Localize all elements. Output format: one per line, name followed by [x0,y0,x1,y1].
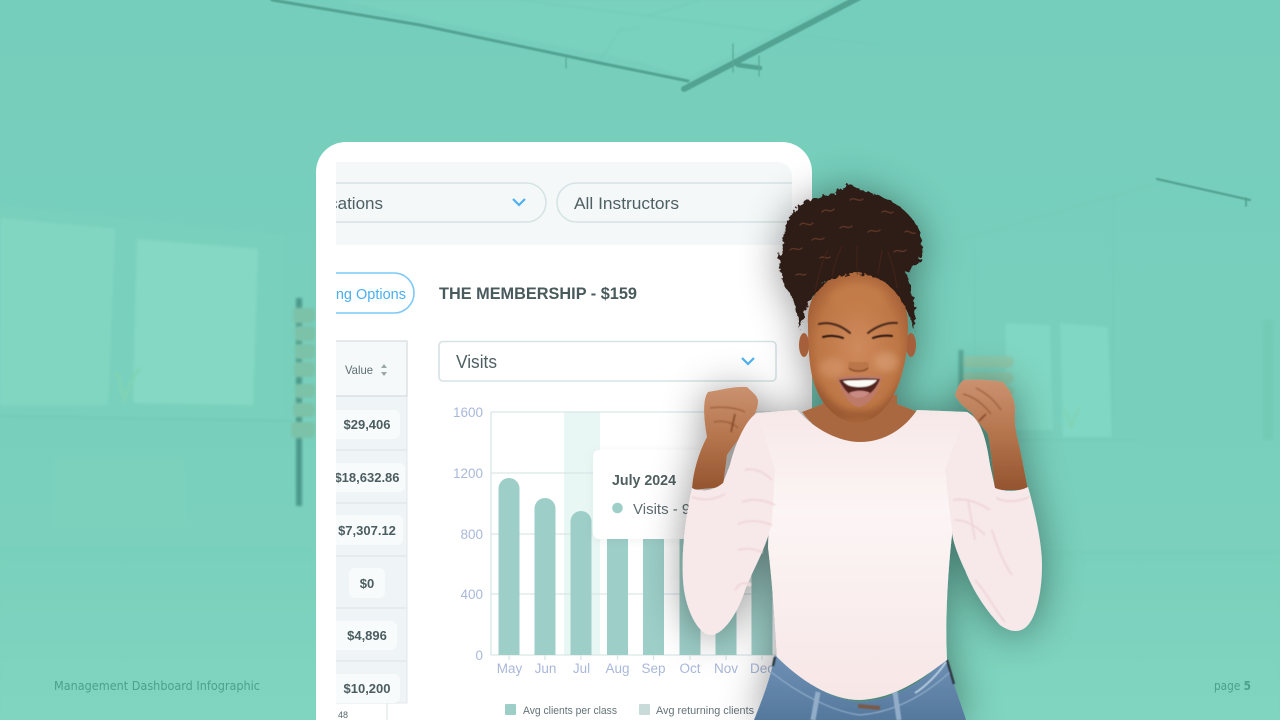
ceiling panels [340,0,880,78]
metric select box [439,342,776,381]
locations dropdown [336,182,547,223]
right sleeve [945,412,1042,631]
value table [336,280,415,720]
nose [848,362,869,373]
footer: page number: page 5 [1214,678,1251,693]
facial features [814,321,900,420]
membership heading: THE MEMBERSHIP - $159 [439,284,637,303]
bar chart: visits by month [453,405,776,717]
torso [745,410,975,700]
hair [779,185,922,330]
bar chart: visits by month: Nov [714,661,738,676]
footer: document title: Management Dashboard Infographic [54,678,260,693]
pricing options button [336,272,415,314]
bar chart: visits by month: 0 [475,648,483,663]
locations dropdown: All Locations [287,194,383,213]
filter bar [336,162,792,245]
bar chart: visits by month: Aug [605,661,630,676]
bar chart: visits by month: 1600 [453,405,483,420]
table values [336,410,405,703]
bar chart: visits by month: 1200 [453,466,483,481]
instructors dropdown [556,182,792,223]
bar chart: visits by month: Sep [641,661,666,676]
highlighted July column [564,412,600,655]
open mouth with teeth [837,376,882,407]
left arm and fist [692,387,758,490]
eyes [823,336,892,338]
value table: Value [345,363,373,377]
table values: $0 [360,576,374,591]
chart tooltip: Visits - 948 [633,501,707,518]
table values: $18,632.86 [334,470,400,485]
table values: $7,307.12 [338,523,396,538]
eyebrows [819,323,897,333]
bar chart: visits by month: May [497,661,522,676]
table values: $4,896 [347,628,387,643]
ears [799,333,916,357]
instructors dropdown: All Instructors [574,194,679,213]
table values: $29,406 [344,417,390,432]
person: celebrating woman with raised fists [683,185,1042,720]
ceiling beams [272,0,1250,206]
jeans [754,655,966,720]
right arm and fist [955,380,1028,490]
panel: dashboard card [316,142,812,720]
bar chart: visits by month: 400 [460,587,483,602]
table values: $10,200 [344,681,390,696]
neck [802,395,918,444]
bar chart: visits by month: 800 [460,527,483,542]
chart legend [505,704,754,717]
bar chart: visits by month: Jul [573,661,590,676]
chart legend: Avg clients per class [523,705,617,717]
left sleeve [683,413,775,635]
chart tooltip [593,450,733,539]
bar chart: visits by month: Jun [535,661,556,676]
face [808,272,908,423]
metric select box: Visits [456,352,497,372]
chart legend: Avg returning clients [656,705,754,717]
bar chart: visits by month: Oct [679,661,701,676]
pricing options button: Pricing Options [308,287,406,303]
value table: 48 [338,710,348,720]
bar chart: visits by month: Dec [750,661,774,676]
chart tooltip: July 2024 [612,472,677,489]
